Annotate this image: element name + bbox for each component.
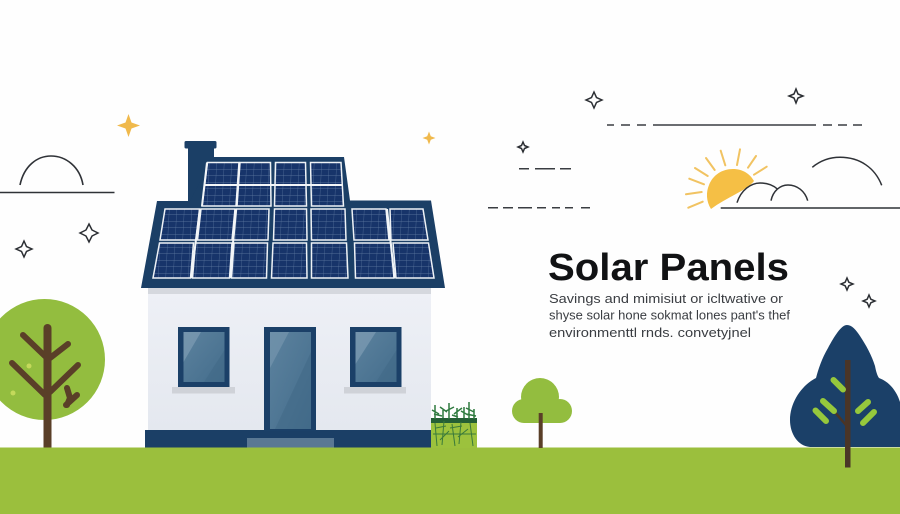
left window sill	[172, 387, 235, 394]
dashed lines	[488, 125, 862, 208]
bush	[431, 402, 477, 448]
description text: environmenttl rnds. convetyjnel	[549, 326, 751, 340]
decorative line art: left arc and horizon	[0, 156, 114, 192]
icon: clouds line art	[721, 157, 900, 208]
chimney	[184, 141, 216, 206]
right window sill	[344, 387, 406, 394]
description text: shyse solar hone sokmat lones pant's thef	[549, 308, 791, 322]
icon: gold stars	[117, 114, 436, 144]
left window	[178, 327, 230, 388]
solar panels upper block	[202, 162, 344, 206]
description text	[549, 292, 791, 340]
left tree	[0, 299, 105, 448]
house base	[145, 430, 431, 448]
door	[264, 327, 316, 431]
description text: Savings and mimisiut or icltwative or	[549, 292, 783, 306]
door step	[247, 438, 334, 448]
right tree	[790, 325, 900, 468]
title: Solar Panels	[548, 247, 789, 289]
icon: sun	[686, 149, 767, 209]
right window	[350, 327, 402, 388]
panel dividers	[191, 162, 394, 278]
small tree	[512, 378, 572, 448]
solar panels middle rows	[153, 209, 434, 278]
ground	[0, 448, 900, 514]
icon: outline sparkle stars	[16, 89, 875, 307]
house	[141, 141, 445, 448]
wall	[148, 288, 431, 431]
roof	[141, 157, 445, 288]
